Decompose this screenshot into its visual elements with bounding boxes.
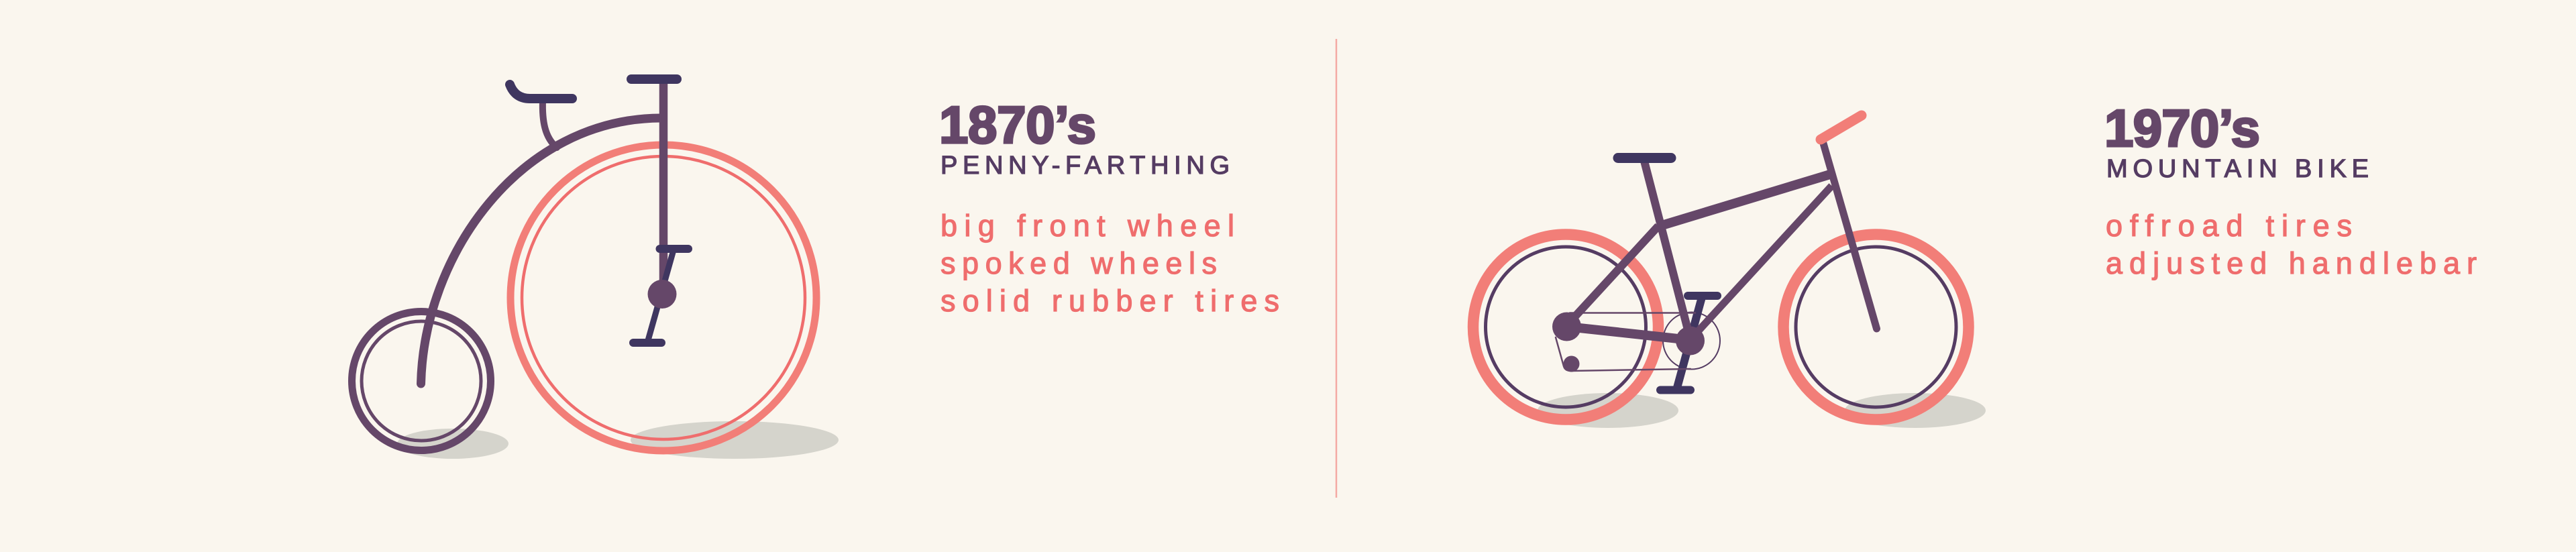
feature list: big front wheel (941, 209, 1234, 243)
small rear wheel (352, 311, 491, 451)
feature list (2106, 209, 2477, 280)
handlebar stem (543, 101, 557, 148)
rear wheel (1473, 235, 1658, 420)
illustration: mountain bike (1473, 115, 1986, 428)
handlebar (1821, 115, 1862, 140)
feature list: spoked wheels (941, 246, 1217, 280)
feature list: adjusted handlebar (2106, 246, 2477, 280)
derailleur pulley (1563, 355, 1579, 372)
feature list: offroad tires (2106, 209, 2352, 243)
rear hub (1552, 313, 1581, 341)
ground shadow: big wheel (631, 421, 839, 459)
frame (1567, 142, 1877, 340)
subheading: mountain bike: MOUNTAIN BIKE (2106, 155, 2369, 183)
crank and pedals (1660, 296, 1717, 390)
ground shadow: rear wheel (1538, 393, 1678, 428)
feature list: solid rubber tires (941, 284, 1279, 318)
heading: 1970's: 1970’s (2104, 99, 2260, 158)
vertical fork (659, 79, 667, 288)
subheading: penny-farthing: PENNY-FARTHING (941, 152, 1230, 180)
ground shadow: small wheel (397, 429, 508, 459)
text block: 1870's (939, 95, 1279, 318)
ground shadow: front wheel (1845, 393, 1986, 428)
front wheel (1783, 235, 1968, 420)
bottom bracket (1676, 326, 1705, 355)
curved frame (421, 118, 661, 384)
feature list (941, 209, 1279, 318)
chain ring (1663, 313, 1720, 369)
front hub (648, 280, 676, 309)
crank and pedals (633, 249, 688, 343)
chain (1556, 313, 1695, 371)
illustration: penny-farthing bicycle (352, 79, 839, 459)
saddle (1618, 153, 1671, 163)
big front wheel (511, 145, 816, 451)
handlebar (510, 85, 572, 99)
text block: 1970's (2104, 99, 2477, 280)
saddle (631, 74, 677, 84)
heading: 1870's: 1870’s (939, 95, 1096, 154)
